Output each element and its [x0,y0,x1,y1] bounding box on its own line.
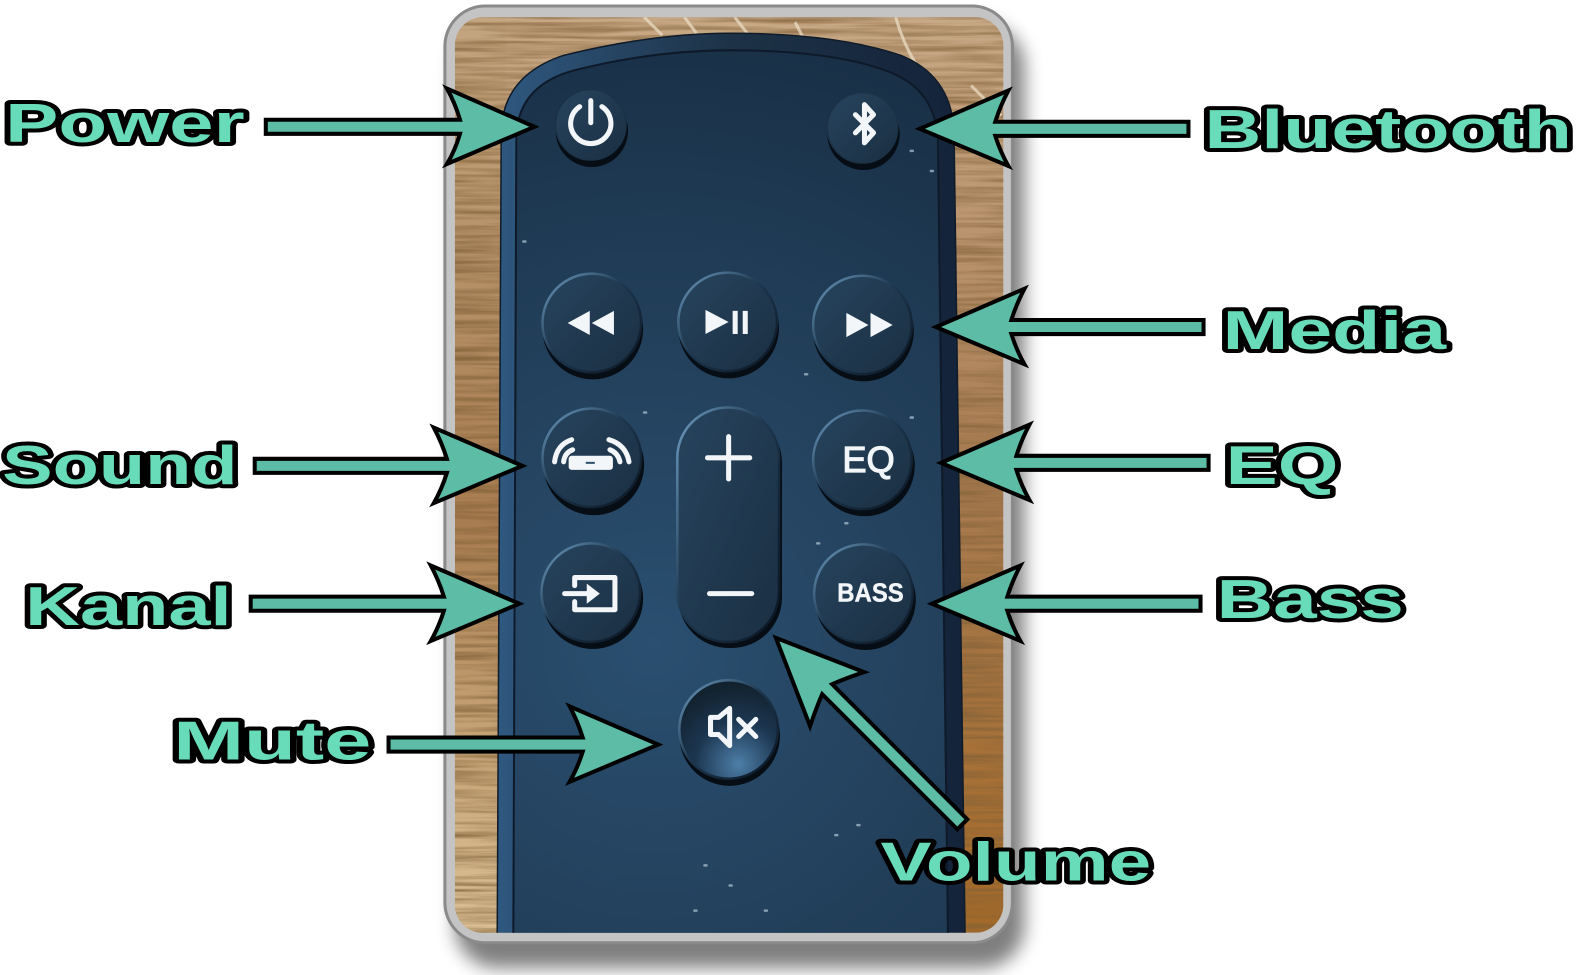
button: bass [814,544,916,650]
arrow: power [266,89,534,164]
arrow: sound [255,428,522,503]
icon: bluetooth [855,105,874,143]
button: power [556,90,628,167]
label: Mute: Mute [173,711,371,772]
label: BASS: BASS [837,578,904,608]
label: Media: Media [1223,300,1447,361]
button: mute [679,680,780,786]
icon: rewind [568,311,614,335]
icon: plus [708,437,750,479]
icon: fast forward [846,313,893,337]
button: rewind [542,274,643,379]
remote control body [497,33,965,936]
arrow: media [936,289,1204,364]
label: EQ: EQ [1226,435,1338,496]
icon: mute speaker [711,708,756,746]
button: sound [542,409,644,515]
arrow: EQ [941,425,1209,500]
surface speckles [523,151,933,911]
label: Bass: Bass [1217,569,1404,630]
button: EQ [813,411,915,516]
icon: play pause [705,310,748,334]
label: EQ: EQ [842,439,895,480]
label: Bluetooth: Bluetooth [1205,99,1572,160]
icon: minus [710,591,752,596]
icon: soundbar waves [555,440,629,470]
label: Kanal: Kanal [25,576,232,637]
label: Power: Power [5,93,245,154]
arrow: kanal [251,565,519,641]
wooden table [455,17,1003,933]
button: fast forward [813,276,914,381]
icon: input [565,578,615,610]
arrow: mute [389,706,658,782]
arrow: bluetooth [920,91,1188,166]
button: bluetooth [827,93,900,170]
arrow: bass [932,565,1201,641]
photo: remote control on wooden table [455,17,1003,936]
button: volume rocker [677,408,782,648]
button: play pause [678,273,779,378]
label: Volume: Volume [881,831,1151,892]
button: input channel [541,543,643,649]
label: Sound: Sound [2,435,238,496]
photo frame with drop shadow [445,6,1024,968]
arrow: volume [749,611,989,851]
icon: power [571,101,611,144]
